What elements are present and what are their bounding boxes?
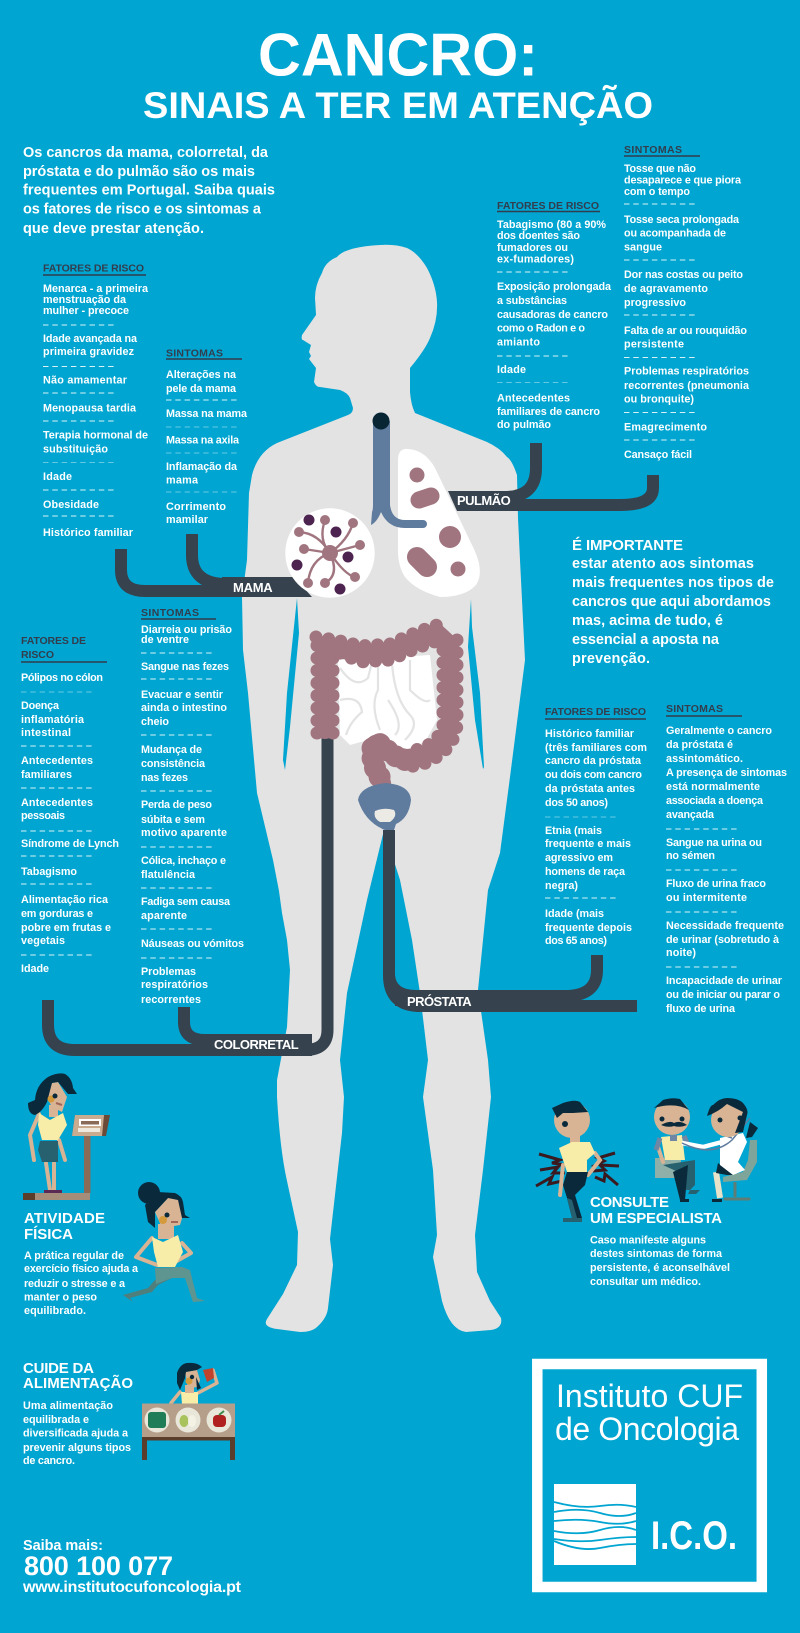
- panel: mama sintomas: Massa na axila: [166, 434, 240, 446]
- panel: colorretal fatores de risco: Tabagismo: [21, 866, 77, 878]
- panel: pulmão sintomas: de agravamento: [624, 283, 708, 295]
- panel: colorretal fatores de risco: vegetais: [21, 935, 65, 947]
- panel: mama fatores de risco: Histórico familiar: [43, 527, 134, 539]
- panel: mama fatores de risco: substituição: [43, 444, 108, 456]
- panel: colorretal fatores de risco: Doença: [21, 700, 60, 712]
- connector: pulmão: [448, 443, 653, 511]
- text block: atividade física: reduzir o stresse e a: [24, 1278, 126, 1290]
- text block: cuide da alimentação: [23, 1360, 133, 1467]
- panel: pulmão sintomas: recorrentes (pneumonia: [624, 380, 750, 392]
- title: SINAIS A TER EM ATENÇÃO: [143, 84, 653, 126]
- panel: pulmão fatores de risco: como o Radon e o: [497, 322, 585, 334]
- callout: é importante: prevenção.: [572, 651, 650, 667]
- panel: pulmão fatores de risco: [497, 200, 612, 431]
- panel: pulmão fatores de risco: Exposição prolongada: [497, 281, 612, 293]
- text block: atividade física: A prática regular de: [24, 1250, 124, 1262]
- panel: mama fatores de risco: Idade: [43, 471, 72, 483]
- text block: consulte um especialista: Caso manifeste alguns: [590, 1234, 706, 1246]
- panel: mama sintomas: Corrimento: [166, 501, 226, 513]
- panel: colorretal sintomas: Perda de peso: [141, 799, 212, 811]
- panel: mama fatores de risco: Menopausa tardia: [43, 402, 137, 414]
- text block: consulte um especialista: destes sintomas de forma: [590, 1248, 723, 1260]
- panel: próstata fatores de risco: agressivo em: [545, 852, 613, 864]
- panel: pulmão sintomas: progressivo: [624, 297, 686, 309]
- panel: próstata fatores de risco: dos 50 anos): [545, 797, 608, 809]
- panel: pulmão sintomas: com o tempo: [624, 186, 690, 198]
- panel: próstata sintomas: Geralmente o cancro: [666, 725, 772, 737]
- text block: cuide da alimentação: prevenir alguns tipos: [23, 1442, 131, 1454]
- label: colorretal: COLORRETAL: [214, 1037, 299, 1052]
- text block: consulte um especialista: [590, 1194, 730, 1288]
- panel: colorretal sintomas: respiratórios: [141, 979, 208, 991]
- panel: mama sintomas: mamilar: [166, 514, 209, 526]
- panel: colorretal fatores de risco: intestinal: [21, 727, 71, 739]
- icon: man in pain: [536, 1101, 619, 1222]
- text block: consulte um especialista: persistente, é aconselhável: [590, 1262, 730, 1274]
- panel: colorretal fatores de risco: Pólipos no cólon: [21, 672, 103, 684]
- contact details: www.institutocufoncologia.pt: [22, 1579, 242, 1596]
- panel: próstata sintomas: está normalmente: [666, 781, 760, 793]
- icon: patient and doctor: [654, 1098, 758, 1202]
- text block: cuide da alimentação: Uma alimentação: [23, 1400, 113, 1412]
- label: pulmão: PULMÃO: [457, 493, 511, 508]
- logo: instituto cuf de oncologia: [537, 1364, 762, 1587]
- panel: próstata fatores de risco: Histórico familiar: [545, 728, 635, 740]
- panel: pulmão fatores de risco: fumadores ou: [497, 242, 568, 254]
- panel: colorretal sintomas: Mudança de: [141, 744, 202, 756]
- title: [143, 22, 653, 126]
- panel: colorretal fatores de risco: em gorduras e: [21, 908, 93, 920]
- panel: próstata sintomas: Sangue na urina ou: [666, 837, 762, 849]
- panel: mama sintomas: Massa na mama: [166, 408, 248, 420]
- panel: colorretal sintomas: recorrentes: [141, 994, 201, 1006]
- intro text: próstata e do pulmão são os mais: [23, 164, 255, 180]
- panel: próstata fatores de risco: da próstata antes: [545, 783, 635, 795]
- panel: pulmão fatores de risco: causadoras de cancro: [497, 309, 608, 321]
- panel: colorretal sintomas: Náuseas ou vómitos: [141, 938, 244, 950]
- panel: colorretal sintomas: Sangue nas fezes: [141, 661, 229, 673]
- panel: próstata fatores de risco: Etnia (mais: [545, 825, 602, 837]
- panel: pulmão sintomas: Cansaço fácil: [624, 449, 692, 461]
- organ: trachea: [371, 412, 427, 528]
- panel: pulmão fatores de risco: do pulmão: [497, 419, 551, 431]
- intro text: os fatores de risco e os sintomas a: [23, 202, 262, 218]
- organ: small intestine: [338, 655, 437, 752]
- panel: colorretal sintomas: ainda o intestino: [141, 702, 227, 714]
- intro text: frequentes em Portugal. Saiba quais: [23, 183, 275, 199]
- panel: colorretal fatores de risco: familiares: [21, 769, 72, 781]
- panel: pulmão sintomas: sangue: [624, 242, 662, 254]
- panel: próstata fatores de risco: ou dois com cancro: [545, 769, 642, 781]
- panel: mama fatores de risco: Menarca - a primeira: [43, 283, 149, 295]
- panel: mama sintomas: [166, 348, 248, 526]
- text block: cuide da alimentação: equilibrada e: [23, 1414, 89, 1426]
- panel: próstata fatores de risco: Idade (mais: [545, 908, 604, 920]
- panel: próstata sintomas: noite): [666, 947, 696, 959]
- callout: é importante: mais frequentes nos tipos de: [572, 575, 774, 591]
- contact details: [22, 1538, 242, 1596]
- panel: mama sintomas: Alterações na: [166, 369, 237, 381]
- panel: colorretal sintomas: SINTOMAS: [141, 607, 199, 619]
- panel: pulmão fatores de risco: dos doentes são: [497, 230, 580, 242]
- panel: próstata sintomas: associada a doença: [666, 795, 764, 807]
- panel: próstata sintomas: fluxo de urina: [666, 1003, 736, 1015]
- panel: pulmão sintomas: SINTOMAS: [624, 144, 682, 156]
- text block: atividade física: equilibrado.: [24, 1305, 86, 1317]
- panel: próstata sintomas: Fluxo de urina fraco: [666, 878, 766, 890]
- panel: próstata sintomas: [666, 703, 787, 1015]
- panel: colorretal fatores de risco: pessoais: [21, 810, 65, 822]
- connector: colorretal: [48, 738, 328, 1056]
- panel: próstata fatores de risco: [545, 706, 647, 947]
- panel: mama fatores de risco: Idade avançada na: [43, 333, 138, 345]
- panel: próstata sintomas: no sémen: [666, 850, 715, 862]
- panel: colorretal sintomas: consistência: [141, 758, 206, 770]
- panel: colorretal fatores de risco: Antecedentes: [21, 797, 93, 809]
- label: mama: MAMA: [233, 580, 273, 595]
- panel: pulmão sintomas: desaparece e que piora: [624, 174, 742, 186]
- callout: é importante: estar atento aos sintomas: [572, 556, 754, 572]
- body silhouette: [242, 245, 525, 1332]
- panel: colorretal sintomas: Evacuar e sentir: [141, 689, 224, 701]
- panel: colorretal sintomas: Problemas: [141, 966, 196, 978]
- title: CANCRO:: [258, 22, 538, 88]
- panel: mama fatores de risco: FATORES DE RISCO: [43, 262, 144, 274]
- logo: instituto cuf de oncologia: I.C.O.: [651, 1514, 737, 1558]
- organ: breast cells: [285, 508, 375, 598]
- panel: colorretal fatores de risco: inflamatória: [21, 714, 85, 726]
- organ: bladder: [358, 783, 411, 830]
- panel: mama fatores de risco: Obesidade: [43, 499, 99, 511]
- panel: pulmão sintomas: Tosse seca prolongada: [624, 214, 740, 226]
- panel: próstata fatores de risco: (três familiares com: [545, 742, 647, 754]
- connector: próstata: [389, 830, 637, 1012]
- panel: próstata sintomas: de urinar (sobretudo à: [666, 934, 780, 946]
- panel: próstata sintomas: ou de iniciar ou parar o: [666, 989, 780, 1001]
- panel: pulmão sintomas: Falta de ar ou rouquidão: [624, 325, 747, 337]
- callout: é importante: essencial a aposta na: [572, 632, 720, 648]
- panel: colorretal sintomas: motivo aparente: [141, 827, 227, 839]
- panel: mama fatores de risco: [43, 262, 149, 539]
- panel: próstata fatores de risco: homens de raça: [545, 866, 626, 878]
- text block: atividade física: ATIVIDADE: [24, 1210, 105, 1227]
- panel: pulmão sintomas: ou acompanhada de: [624, 228, 726, 240]
- panel: pulmão fatores de risco: Idade: [497, 364, 526, 376]
- panel: mama sintomas: Inflamação da: [166, 461, 238, 473]
- panel: colorretal fatores de risco: Idade: [21, 963, 49, 975]
- panel: próstata sintomas: ou intermitente: [666, 892, 747, 904]
- panel: colorretal fatores de risco: RISCO: [21, 649, 54, 661]
- panel: pulmão fatores de risco: Tabagismo (80 a 90%: [497, 219, 606, 231]
- panel: mama sintomas: SINTOMAS: [166, 348, 223, 360]
- organ: lung: [398, 449, 480, 597]
- panel: próstata fatores de risco: frequente e mais: [545, 838, 631, 850]
- panel: pulmão fatores de risco: ex-fumadores): [497, 254, 574, 266]
- text block: cuide da alimentação: diversificada ajuda a: [23, 1428, 129, 1440]
- panel: pulmão fatores de risco: amianto: [497, 337, 540, 349]
- panel: pulmão sintomas: persistente: [624, 338, 684, 350]
- panel: mama fatores de risco: primeira gravidez: [43, 346, 135, 358]
- panel: colorretal sintomas: de ventre: [141, 634, 189, 646]
- intro text: que deve prestar atenção.: [23, 221, 204, 237]
- organ: colon: [316, 625, 457, 783]
- panel: colorretal sintomas: aparente: [141, 910, 187, 922]
- connector: mama: [121, 534, 312, 597]
- panel: mama fatores de risco: Terapia hormonal de: [43, 430, 148, 442]
- panel: próstata fatores de risco: frequente depois: [545, 922, 632, 934]
- icon: woman exercising: [123, 1182, 205, 1302]
- text block: consulte um especialista: consultar um médico.: [590, 1276, 701, 1288]
- panel: pulmão sintomas: Tosse que não: [624, 163, 696, 175]
- icon: woman at table with food: [142, 1363, 235, 1460]
- panel: próstata fatores de risco: dos 65 anos): [545, 935, 607, 947]
- text block: cuide da alimentação: ALIMENTAÇÃO: [23, 1374, 133, 1392]
- icon: woman on scale: [23, 1073, 110, 1200]
- panel: pulmão sintomas: Dor nas costas ou peito: [624, 269, 743, 281]
- panel: colorretal sintomas: Cólica, inchaço e: [141, 855, 226, 867]
- text block: consulte um especialista: CONSULTE: [590, 1194, 669, 1211]
- panel: mama sintomas: pele da mama: [166, 383, 237, 395]
- panel: pulmão fatores de risco: FATORES DE RISCO: [497, 200, 599, 212]
- panel: próstata fatores de risco: FATORES DE RISCO: [545, 706, 646, 718]
- panel: colorretal fatores de risco: Síndrome de Lynch: [21, 838, 119, 850]
- panel: colorretal sintomas: cheio: [141, 716, 169, 728]
- callout: é importante: cancros que aqui abordamos: [572, 594, 771, 610]
- panel: colorretal sintomas: súbita e sem: [141, 814, 205, 826]
- text block: atividade física: exercício físico ajuda a: [24, 1263, 139, 1275]
- panel: próstata sintomas: assintomático.: [666, 753, 743, 765]
- panel: colorretal sintomas: [141, 607, 244, 1006]
- panel: colorretal fatores de risco: Antecedentes: [21, 755, 93, 767]
- panel: colorretal fatores de risco: Alimentação rica: [21, 894, 109, 906]
- panel: próstata sintomas: A presença de sintomas: [666, 767, 787, 779]
- panel: colorretal fatores de risco: FATORES DE: [21, 635, 86, 647]
- panel: próstata fatores de risco: negra): [545, 880, 578, 892]
- panel: pulmão fatores de risco: a substâncias: [497, 295, 567, 307]
- logo: instituto cuf de oncologia: de Oncologia: [555, 1411, 739, 1447]
- panel: pulmão sintomas: Emagrecimento: [624, 422, 707, 434]
- text block: cuide da alimentação: CUIDE DA: [23, 1360, 94, 1377]
- text block: consulte um especialista: UM ESPECIALISTA: [590, 1210, 722, 1227]
- panel: pulmão fatores de risco: Antecedentes: [497, 392, 570, 404]
- panel: colorretal sintomas: Diarreia ou prisão: [141, 624, 232, 636]
- panel: pulmão fatores de risco: familiares de cancro: [497, 406, 600, 418]
- text block: atividade física: FÍSICA: [24, 1226, 73, 1243]
- panel: próstata sintomas: SINTOMAS: [666, 703, 723, 715]
- panel: colorretal fatores de risco: pobre em frutas e: [21, 922, 111, 934]
- panel: próstata sintomas: avançada: [666, 809, 715, 821]
- text block: cuide da alimentação: de cancro.: [23, 1455, 75, 1467]
- text block: atividade física: manter o peso: [24, 1292, 97, 1304]
- label: próstata: PRÓSTATA: [407, 994, 472, 1009]
- panel: mama sintomas: mama: [166, 474, 199, 486]
- arm gaps: [283, 598, 484, 770]
- contact details: Saiba mais:: [23, 1538, 103, 1554]
- callout: é importante: mas, acima de tudo, é: [572, 613, 723, 629]
- panel: mama fatores de risco: Não amamentar: [43, 374, 128, 386]
- panel: próstata sintomas: Necessidade frequente: [666, 920, 784, 932]
- panel: mama fatores de risco: mulher - precoce: [43, 305, 129, 317]
- panel: próstata sintomas: da próstata é: [666, 739, 733, 751]
- panel: mama fatores de risco: menstruação da: [43, 294, 127, 306]
- panel: colorretal sintomas: nas fezes: [141, 772, 188, 784]
- panel: pulmão sintomas: [624, 144, 750, 461]
- panel: próstata fatores de risco: cancro da próstata: [545, 755, 642, 767]
- panel: próstata sintomas: Incapacidade de urinar: [666, 975, 783, 987]
- text block: atividade física: [24, 1210, 139, 1317]
- panel: pulmão sintomas: ou bronquite): [624, 394, 694, 406]
- panel: pulmão sintomas: Problemas respiratórios: [624, 366, 749, 378]
- intro text: [23, 145, 275, 237]
- callout: é importante: É IMPORTANTE: [572, 537, 683, 554]
- contact details: 800 100 077: [24, 1551, 173, 1581]
- panel: colorretal sintomas: Fadiga sem causa: [141, 896, 231, 908]
- intro text: Os cancros da mama, colorretal, da: [23, 145, 269, 161]
- logo: instituto cuf de oncologia: Instituto CUF: [556, 1378, 743, 1414]
- panel: colorretal sintomas: flatulência: [141, 869, 196, 881]
- panel: colorretal fatores de risco: [21, 635, 119, 975]
- callout: é importante: [572, 537, 774, 667]
